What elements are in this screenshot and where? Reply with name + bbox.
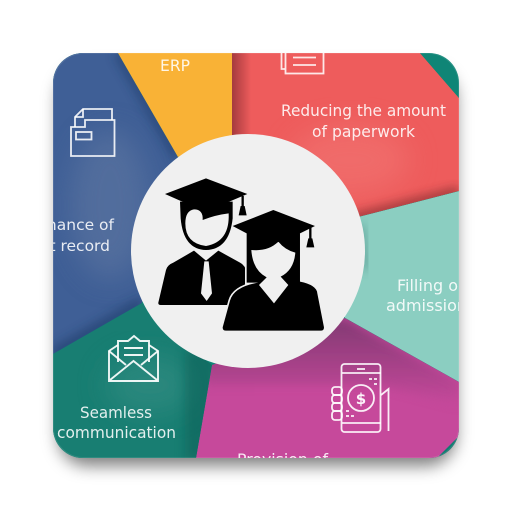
app icon card [53, 53, 459, 458]
icon: folder [71, 109, 114, 156]
male graduate [158, 178, 250, 305]
icon: mobile payment: $ [356, 390, 366, 408]
segment: red [232, 53, 459, 219]
label: seamless communication: Seamless [80, 403, 152, 422]
segment: yellow [118, 53, 232, 157]
label: filling out admission: Filling out [397, 276, 474, 295]
label: maintenance of student record [53, 218, 114, 251]
label: filling out admission: admission form [386, 296, 509, 315]
card shadow [58, 68, 456, 466]
segment: teal [53, 303, 215, 460]
center circle [131, 134, 365, 368]
segment: mint [344, 191, 459, 382]
label: provision of: Provision of [237, 450, 328, 469]
label: reducing paperwork [281, 101, 446, 141]
icon: document [280, 53, 324, 74]
segment: magenta [196, 318, 459, 458]
label: seamless communication [58, 406, 175, 438]
icon: mobile payment [332, 364, 388, 432]
icon: envelope [109, 336, 158, 381]
label: reducing paperwork: Reducing the amount [281, 101, 446, 120]
segment: blue [53, 53, 178, 354]
corner: bottom right teal sliver [438, 438, 458, 456]
card edge highlight [54, 54, 458, 458]
icon: graduates [158, 178, 324, 331]
label: filling out admission [387, 279, 459, 311]
label: ERP: ERP [160, 56, 190, 75]
female graduate [223, 210, 324, 331]
label: seamless communication: communication [57, 423, 176, 442]
label: reducing paperwork: of paperwork [312, 122, 416, 141]
